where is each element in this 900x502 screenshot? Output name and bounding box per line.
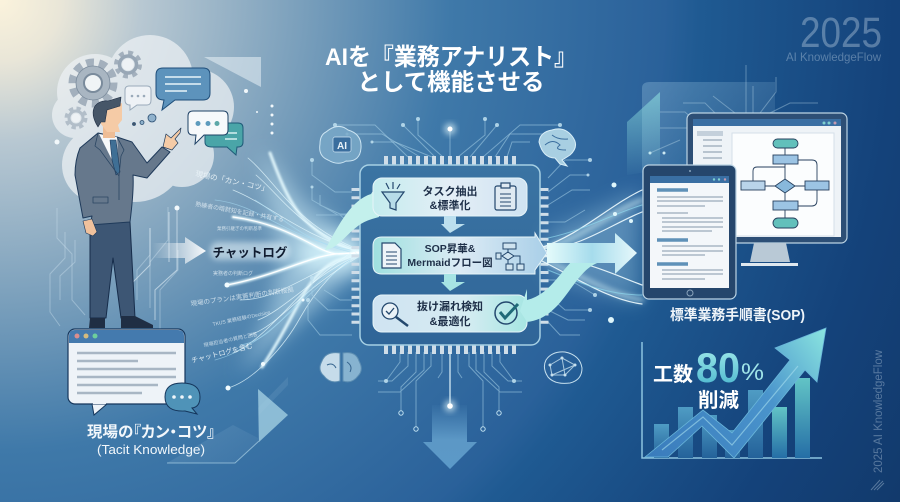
circuit traces around chip <box>308 119 595 427</box>
glowing top node <box>444 123 456 135</box>
title: として機能させる <box>358 69 544 95</box>
big output arrow <box>547 233 637 274</box>
icon: watermark mark <box>871 480 884 490</box>
faint circuit near chat arrow <box>130 206 180 320</box>
icon: magnifier <box>382 303 408 326</box>
flowchart canvas <box>732 133 834 236</box>
caption: tacit knowledge: (Tacit Knowledge) <box>97 442 205 457</box>
decorative arrow lower left <box>167 377 288 463</box>
icon: clipboard <box>495 183 516 210</box>
figure: businessman <box>75 97 181 328</box>
small tilted text in stream: 現場の「カン・コツ」 <box>195 168 270 194</box>
headline metric: 80 <box>696 344 740 391</box>
step panel: task extraction <box>373 178 527 216</box>
big down arrow <box>423 405 477 469</box>
monitor <box>687 113 847 266</box>
icon: chat bubble on card <box>165 383 200 414</box>
caption: tacit knowledge: 現場の『カン・コツ』 <box>87 423 215 441</box>
label: SOP: 標準業務手順書(SOP) <box>670 306 805 324</box>
vertical watermark: 2025 AI KnowledgeFlow <box>873 349 885 473</box>
icon: brain top right <box>539 129 576 166</box>
lower hand <box>83 219 97 236</box>
small tilted text in stream: TKUS 業務経験のDecision <box>212 309 271 328</box>
watermark: year: 2025 <box>800 9 882 57</box>
text: SOP and Mermaid: Mermaidフロー図 <box>407 257 493 269</box>
text: SOP and Mermaid <box>407 242 493 269</box>
headline metric: % <box>741 359 764 386</box>
sparkle dots right <box>608 152 666 323</box>
headline metric: 削減 <box>698 388 739 412</box>
watermark: year: AI KnowledgeFlow <box>786 50 881 64</box>
icon: funnel <box>382 182 404 210</box>
caption: tacit knowledge <box>87 423 215 457</box>
pointing hand <box>163 128 181 150</box>
trousers <box>90 222 135 318</box>
small tilted text in stream: チャットログを含む <box>190 341 254 365</box>
watermark: year <box>786 9 882 64</box>
label: chat log: チャットログ <box>213 245 288 260</box>
text: gap detection: 抜け漏れ検知 <box>417 299 483 313</box>
shoes <box>89 316 153 328</box>
text: SOP and Mermaid: SOP昇華& <box>425 242 476 255</box>
light streams: left fan <box>215 153 360 388</box>
step panel: SOP and Mermaid <box>373 233 547 274</box>
icon: flow chart <box>496 243 524 270</box>
icon: network brain <box>544 352 582 383</box>
icon: small gear <box>117 54 139 76</box>
text: task extraction <box>422 184 478 212</box>
small tilted text in stream: 実務者の判断ログ <box>213 270 253 277</box>
title <box>325 44 577 95</box>
glow nodes on stream <box>224 282 304 390</box>
icon: document <box>382 243 401 268</box>
monitor screen <box>693 119 841 237</box>
teal flow band out of step 3 <box>520 247 600 322</box>
processor chip <box>360 165 540 345</box>
monitor stand <box>750 243 790 262</box>
icon: white bubble with dots <box>188 111 228 144</box>
sparkle dots near cloud <box>54 89 274 144</box>
tablet <box>643 165 736 299</box>
icon: brain bottom left <box>320 353 361 382</box>
icon: small white bubble <box>125 86 151 110</box>
headline metric: 工数 <box>653 363 693 386</box>
document lines <box>657 190 723 279</box>
arrow: step 2 to 3 <box>441 274 465 291</box>
jacket <box>75 133 170 225</box>
text: task extraction: &標準化 <box>430 198 470 212</box>
chip pins <box>356 160 544 350</box>
cloud backdrop <box>52 35 234 203</box>
chart axes <box>642 342 822 458</box>
soft glow right of chip <box>548 190 640 305</box>
card: knowledge window <box>68 329 185 415</box>
headline metric <box>653 344 764 412</box>
hair <box>93 97 121 127</box>
icon: check circle <box>495 302 518 324</box>
teal flow arrow into step 1 <box>325 186 379 250</box>
icon: large gear <box>73 63 113 103</box>
monitor sidebar <box>697 131 723 158</box>
chart bars <box>654 378 810 458</box>
small tilted text in stream <box>190 168 295 365</box>
small tilted text in stream: 業務引継ぎの判断基準 <box>217 225 262 232</box>
text: gap detection <box>417 299 483 328</box>
title: AIを『業務アナリスト』 <box>325 44 577 71</box>
small tilted text in stream: 熟練者の暗黙知を記録・共有する <box>195 200 285 224</box>
arrow: chat log input <box>152 237 206 264</box>
rising arrow <box>645 328 826 458</box>
soft glow behind streams <box>240 150 365 375</box>
small tilted text in stream: 現場のプランは実質判断の判断根拠 <box>190 285 295 308</box>
text: gap detection: &最適化 <box>430 314 470 328</box>
chart: effort reduction <box>642 328 826 458</box>
arrow: step 1 to 2 <box>441 216 465 233</box>
flowchart <box>741 139 829 228</box>
shirt and tie <box>99 134 120 175</box>
neck and face <box>100 103 122 138</box>
icon: tiny gear <box>67 109 85 127</box>
text: task extraction: タスク抽出 <box>422 184 478 198</box>
icon: AI brain <box>320 126 361 163</box>
icon: AI brain: AI <box>337 141 347 152</box>
step panel: gap detection <box>373 295 527 332</box>
icon: teal bubble <box>205 123 243 155</box>
light streams: right <box>540 190 642 304</box>
glowing bottom node <box>444 352 456 412</box>
icon: blue speech bubble <box>156 68 210 110</box>
lapels and pocket <box>93 133 124 203</box>
circuit nodes <box>306 117 597 431</box>
decorative triangle top left <box>204 57 261 87</box>
back panel behind monitor <box>627 65 828 200</box>
thought dots <box>132 114 156 126</box>
small tilted text in stream: 現場担当者の質問と回答 <box>203 331 258 349</box>
circuit traces left of figure <box>50 207 178 330</box>
